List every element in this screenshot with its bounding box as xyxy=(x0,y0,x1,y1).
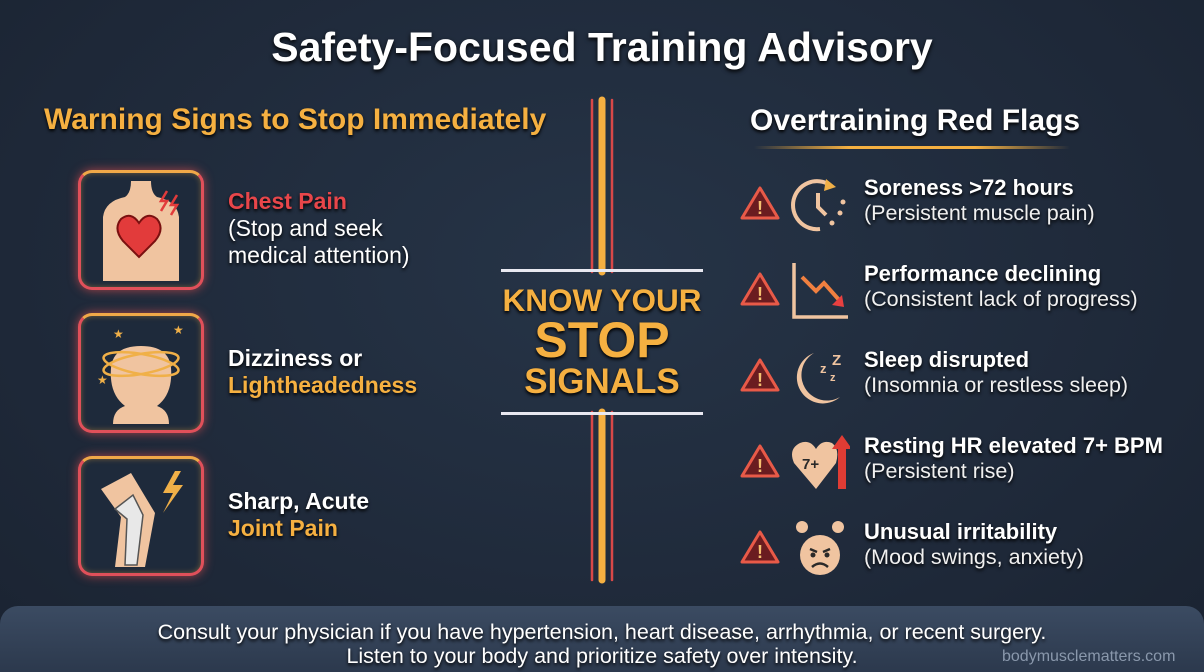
row: resting HR: (Persistent rise) xyxy=(864,459,1015,483)
center callout: know your stop signals: SIGNALS xyxy=(524,362,680,401)
row: performance xyxy=(740,261,1138,319)
row: sleep: Sleep disrupted xyxy=(864,347,1029,372)
icon box: dizziness xyxy=(78,313,204,433)
text: dizziness xyxy=(228,345,418,402)
text: chest pain: Chest Pain xyxy=(228,188,347,214)
row: irritability: Unusual irritability xyxy=(864,519,1057,544)
text: chest pain: (Stop and seek xyxy=(228,215,383,241)
row: sleep: (Insomnia or restless sleep) xyxy=(864,373,1128,397)
row: soreness xyxy=(740,175,1095,232)
heading: warning signs: Warning Signs to Stop Immediately xyxy=(44,103,546,136)
row: irritability: (Mood swings, anxiety) xyxy=(864,545,1084,569)
center callout: know your stop signals xyxy=(501,269,703,415)
row: sleep: z xyxy=(820,361,827,376)
underline: right heading xyxy=(754,146,1070,149)
title: Safety-Focused Training Advisory xyxy=(271,24,933,70)
icon box: chest pain xyxy=(78,170,204,290)
footer panel xyxy=(0,606,1204,672)
row: sleep: ! xyxy=(757,370,763,390)
icon box: dizziness: ★ xyxy=(173,323,184,337)
text: joint pain: Joint Pain xyxy=(228,515,338,541)
center callout: know your stop signals: STOP xyxy=(534,312,670,368)
row: resting HR: Resting HR elevated 7+ BPM xyxy=(864,433,1163,458)
row: soreness: Soreness >72 hours xyxy=(864,175,1074,200)
row: performance: (Consistent lack of progress) xyxy=(864,287,1138,311)
icon box: dizziness: ★ xyxy=(113,327,124,341)
row: resting HR: ! xyxy=(757,456,763,476)
center divider lines xyxy=(590,96,614,584)
row: resting HR xyxy=(740,433,1163,489)
text: dizziness: Lightheadedness xyxy=(228,372,417,398)
text: dizziness: Dizziness or xyxy=(228,345,362,371)
row: irritability: ! xyxy=(757,542,763,562)
icon box: joint pain xyxy=(78,456,204,576)
footer panel: Listen to your body and prioritize safety over intensity. xyxy=(346,644,858,668)
watermark: bodymusclematters.com xyxy=(1002,648,1175,665)
row: resting HR: 7+ xyxy=(802,456,819,473)
row: soreness: ! xyxy=(757,198,763,218)
icon box: dizziness: ★ xyxy=(97,373,108,387)
heading: overtraining red flags: Overtraining Red Flags xyxy=(750,104,1080,137)
row: sleep: Z xyxy=(832,352,841,369)
text: chest pain xyxy=(228,188,410,271)
row: sleep: z xyxy=(830,372,836,384)
center callout: know your stop signals: KNOW YOUR xyxy=(503,282,701,318)
row: soreness: (Persistent muscle pain) xyxy=(864,201,1095,225)
row: sleep xyxy=(740,347,1128,404)
text: joint pain xyxy=(228,488,370,541)
row: performance: ! xyxy=(757,284,763,304)
row: irritability xyxy=(740,519,1084,575)
text: chest pain: medical attention) xyxy=(228,242,410,268)
text: joint pain: Sharp, Acute xyxy=(228,488,369,514)
row: performance: Performance declining xyxy=(864,261,1101,286)
footer panel: Consult your physician if you have hypertension, heart disease, arrhythmia, or recent surgery. xyxy=(158,620,1046,644)
